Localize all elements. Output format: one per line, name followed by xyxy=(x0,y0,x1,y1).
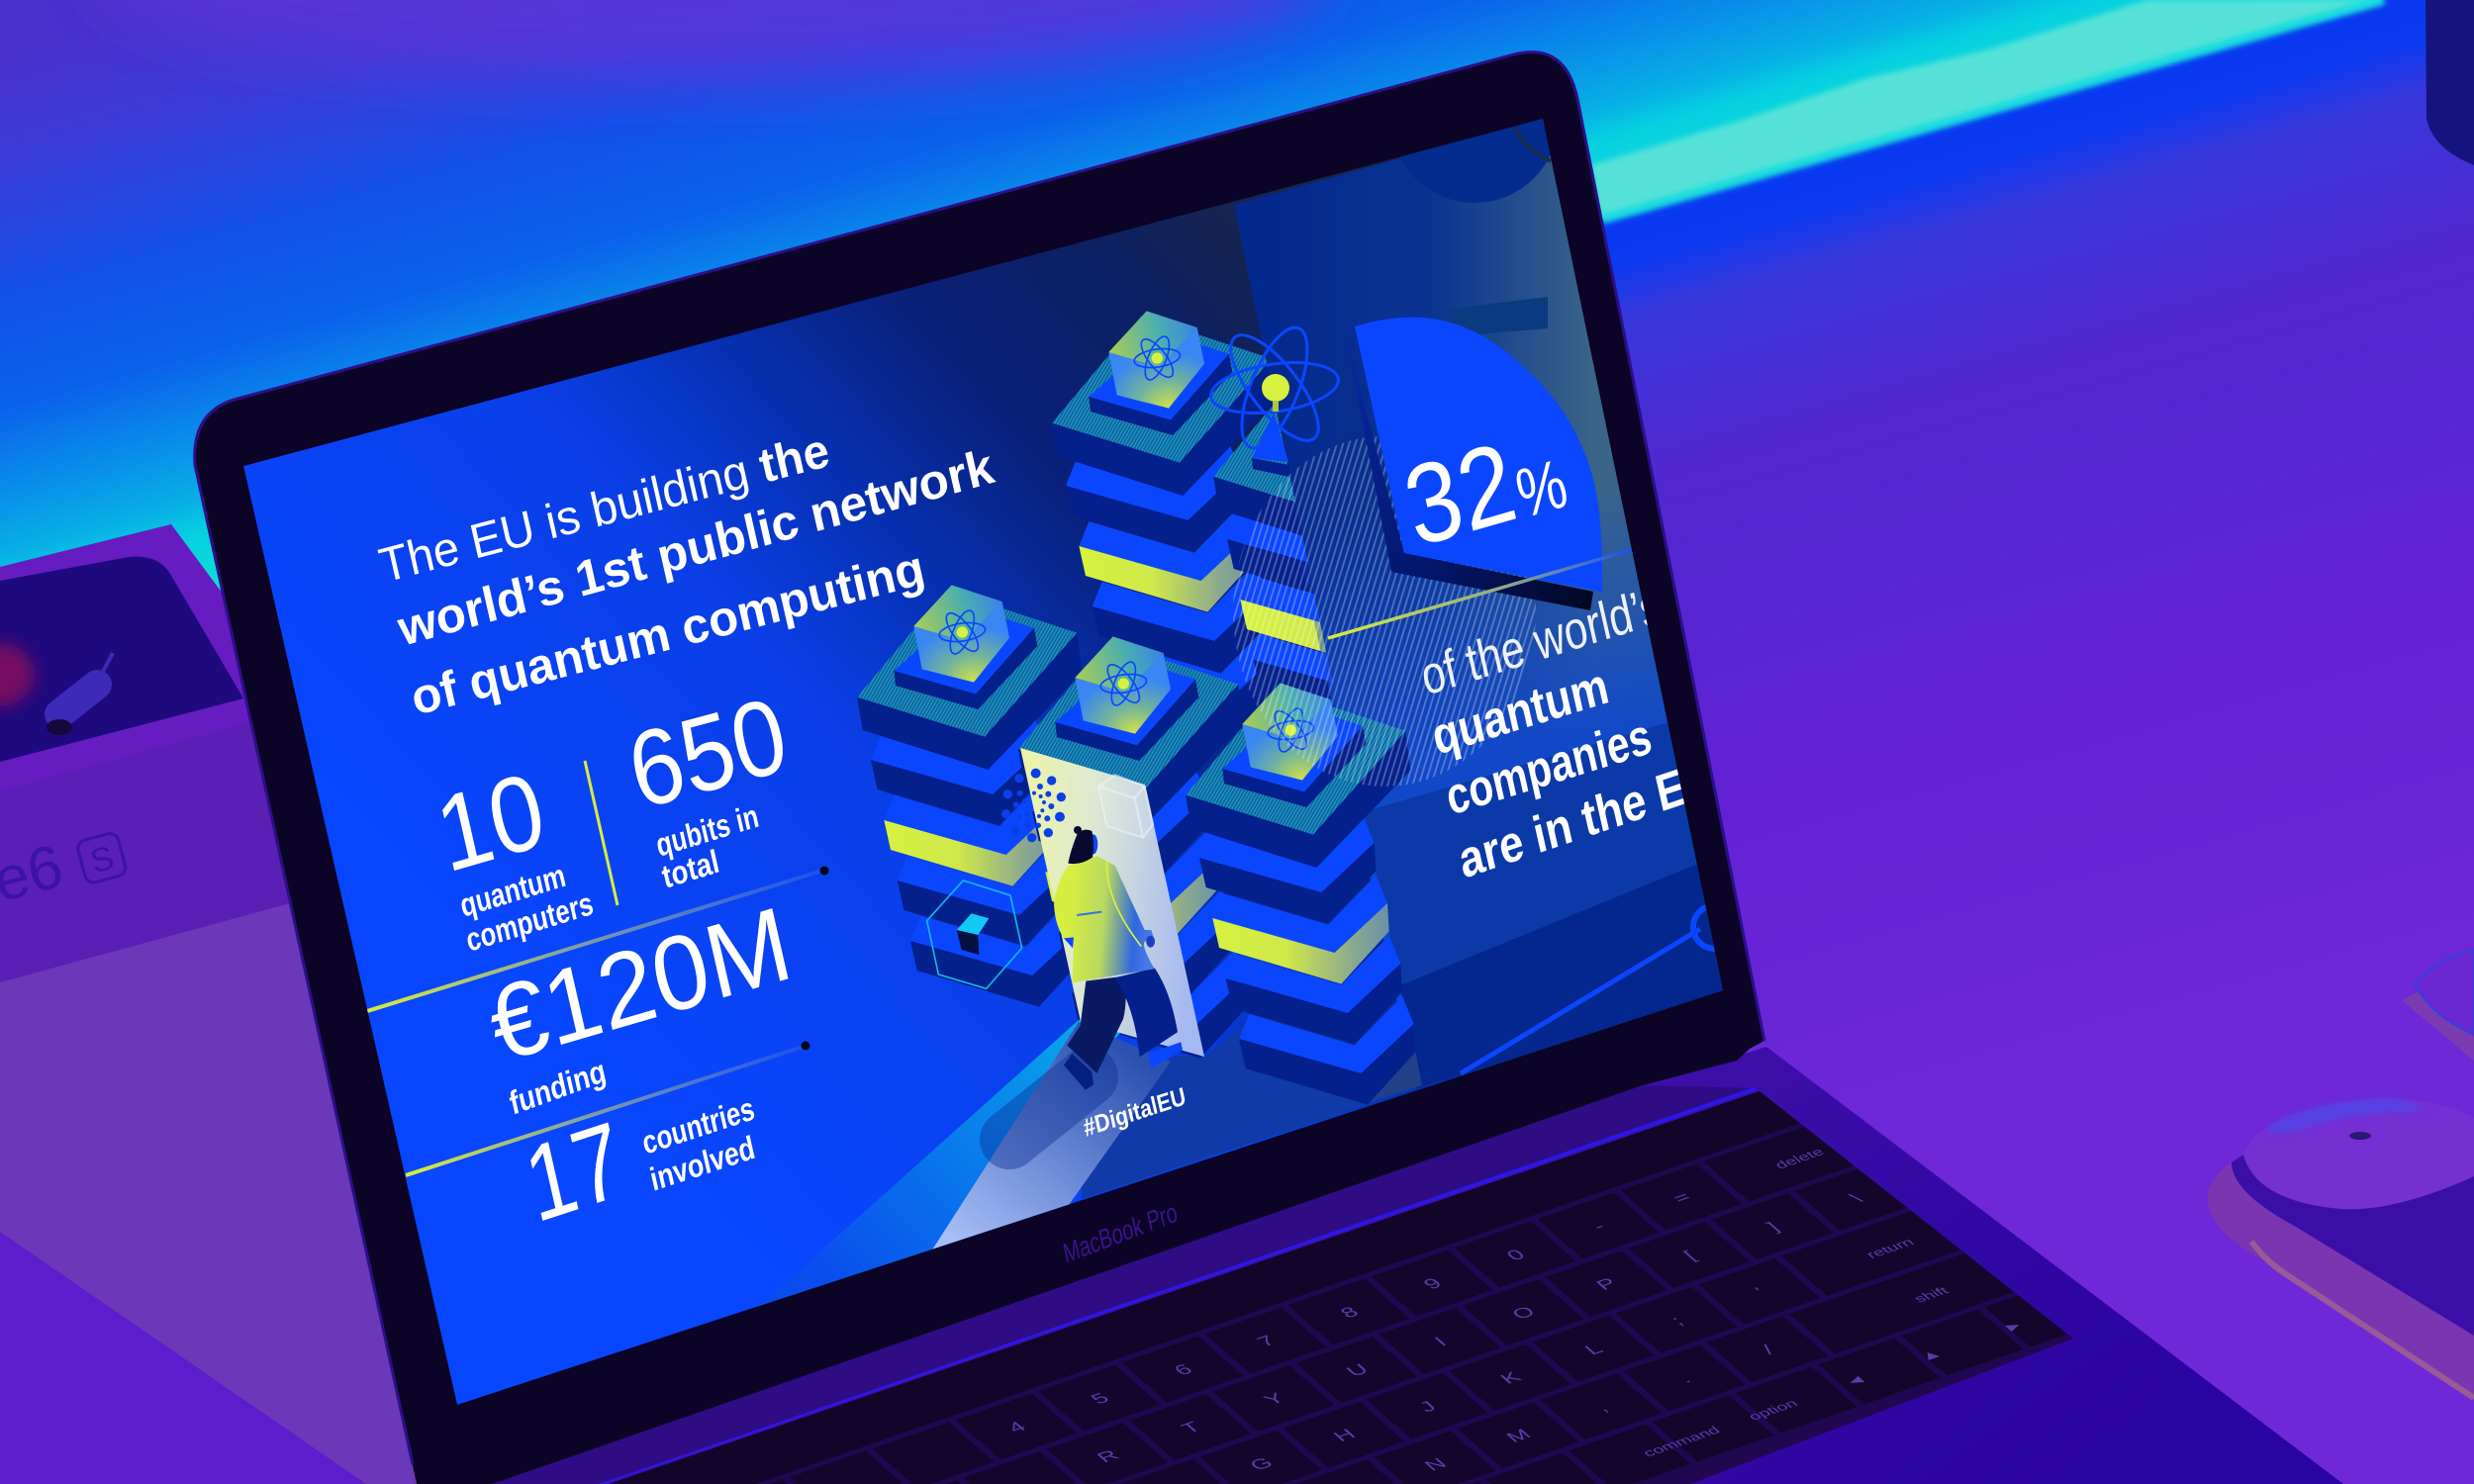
key legends: J xyxy=(1415,1399,1441,1415)
modifier row xyxy=(1472,1294,2066,1484)
pie slice xyxy=(1355,318,1602,592)
object top xyxy=(2415,950,2474,1034)
sim pin xyxy=(47,653,113,735)
lid edge highlight xyxy=(195,52,1764,1464)
connector line to pie xyxy=(1328,550,1631,638)
pie chart 32 percent xyxy=(1347,318,1602,610)
key legends: return xyxy=(1863,1237,1918,1261)
wall upper xyxy=(1234,119,1722,991)
background: wall xyxy=(0,0,2474,712)
key legends: T xyxy=(1178,1419,1205,1437)
key legends: [ xyxy=(1679,1249,1700,1263)
key legends: U xyxy=(1342,1361,1373,1380)
background: violet wall glow xyxy=(99,0,1326,79)
object shell xyxy=(2402,992,2474,1061)
key legends: ' xyxy=(1751,1285,1769,1299)
tower left xyxy=(857,590,1087,1007)
dark arc at top xyxy=(1513,126,1551,161)
background: turquoise LED strip xyxy=(1591,0,2384,220)
mouse disc highlight xyxy=(2266,1098,2425,1134)
tower centre cube xyxy=(1055,636,1198,761)
mouse xyxy=(2208,1098,2474,1398)
box label badge: S xyxy=(86,839,118,881)
key legends: H xyxy=(1329,1427,1360,1444)
screen background xyxy=(243,119,1723,1405)
right leg xyxy=(1115,968,1178,1057)
face xyxy=(1090,834,1097,854)
red reflection xyxy=(0,643,35,706)
stat: 17 countries involved: 17 xyxy=(515,1098,633,1245)
stat: 120M funding: €120M xyxy=(479,884,802,1084)
tower back centre cube xyxy=(1089,311,1232,435)
shift key xyxy=(1789,1252,2015,1353)
mouse shell xyxy=(2208,1162,2474,1398)
text: share of quantum companies xyxy=(1415,575,1721,890)
macbook label: MacBook Pro xyxy=(1060,1196,1180,1269)
key legends: ; xyxy=(1666,1313,1687,1329)
coat xyxy=(1054,856,1155,982)
text: 32 percent: 32 xyxy=(1394,418,1526,571)
left leg xyxy=(1067,976,1126,1073)
key legends: command xyxy=(1640,1425,1724,1459)
left hand xyxy=(1064,937,1074,948)
key legends: 6 xyxy=(1170,1361,1196,1378)
key legends: , xyxy=(1591,1400,1612,1415)
key legends: option xyxy=(1746,1398,1801,1423)
background: LED strip edge xyxy=(1601,0,2384,220)
pie shadow xyxy=(1347,341,1593,610)
divider line with dot 2 xyxy=(406,1041,809,1175)
return key xyxy=(1781,1211,1961,1296)
coat seam xyxy=(1106,861,1141,947)
box side xyxy=(0,714,290,982)
stat: 10 quantum computers: quantum xyxy=(456,857,569,924)
box lower desk xyxy=(0,895,465,1484)
key legends: L xyxy=(1580,1341,1608,1358)
wireframe cube and small cube xyxy=(927,881,1022,988)
coat belt xyxy=(1077,912,1101,915)
key legends: 5 xyxy=(1087,1390,1113,1407)
mouse button disc xyxy=(2243,1098,2474,1209)
floor light beam xyxy=(757,1020,1120,1308)
heading: world’s 1st public network xyxy=(392,438,999,657)
key legends: ▴ xyxy=(1917,1346,1944,1363)
key legends: 9 xyxy=(1419,1275,1446,1292)
stat: 17 countries involved: involved xyxy=(646,1129,758,1198)
key legends: R xyxy=(1093,1447,1123,1466)
box label badge xyxy=(76,832,128,884)
network node xyxy=(1693,905,1737,949)
keyboard well xyxy=(609,1091,2073,1484)
key legends: M xyxy=(1502,1427,1536,1445)
key legends: = xyxy=(1668,1189,1696,1206)
small cube front xyxy=(957,930,979,955)
tower right cube xyxy=(1222,683,1366,807)
hinge light line xyxy=(599,1086,1757,1484)
dark top circle xyxy=(1399,119,1550,203)
stat: 650 qubits in total: qubits in xyxy=(652,796,762,864)
key legends: K xyxy=(1496,1369,1526,1387)
home key row xyxy=(1121,1258,1821,1484)
key legends xyxy=(1003,1144,2027,1484)
upper right object on desk xyxy=(2402,950,2474,1061)
divider line with dot 1 xyxy=(367,867,829,1011)
heading: of quantum computing xyxy=(406,540,929,726)
qwerty key row xyxy=(945,1164,1917,1484)
door wireframe cube xyxy=(1098,775,1153,838)
tower left cube xyxy=(894,585,1037,709)
tower right xyxy=(1186,688,1415,1105)
bottom left desk xyxy=(0,1232,366,1484)
bottom letter row xyxy=(1295,1316,1829,1484)
box dark recess xyxy=(0,557,243,762)
floor white beam xyxy=(920,1022,1171,1268)
person xyxy=(1054,826,1183,1090)
touch bar xyxy=(595,1073,1829,1484)
stat: 650 qubits in total xyxy=(618,674,798,895)
stat: 650 qubits in total: total xyxy=(658,843,722,895)
key legends: / xyxy=(1758,1343,1778,1357)
wall lower tint xyxy=(1286,495,1723,1088)
key legends: ] xyxy=(1762,1220,1783,1235)
text: 32 percent: % xyxy=(1509,444,1573,533)
key legends: 7 xyxy=(1253,1333,1280,1349)
text: share of quantum companies: are in the EU xyxy=(1454,748,1721,890)
dots dissolving on tower xyxy=(1001,774,1036,842)
mouse shell edge xyxy=(2251,1242,2474,1398)
tower centre xyxy=(1018,641,1248,1059)
key legends: delete xyxy=(1771,1147,1828,1171)
key legends: - xyxy=(1588,1219,1610,1235)
box top xyxy=(0,524,259,791)
wireframe outline xyxy=(927,881,1022,988)
key legends: P xyxy=(1592,1275,1622,1293)
stat: 17 countries involved xyxy=(515,1089,758,1245)
door dots xyxy=(1031,769,1066,837)
laptop deck xyxy=(488,1047,2343,1484)
hair xyxy=(1068,830,1094,864)
key legends: \ xyxy=(1846,1191,1866,1206)
key legends: Y xyxy=(1260,1390,1289,1408)
screen infographic xyxy=(243,35,1737,1405)
key legends: shift xyxy=(1911,1285,1952,1305)
door of light xyxy=(1020,748,1204,1057)
tower back centre xyxy=(1052,316,1282,733)
key legends: ▸ xyxy=(2000,1318,2027,1335)
dark wall plaque xyxy=(1451,297,1548,336)
key legends: . xyxy=(1674,1371,1695,1386)
stat: 17 countries involved: countries xyxy=(638,1089,758,1161)
key legends: 8 xyxy=(1336,1304,1363,1321)
number key row xyxy=(769,1163,1743,1484)
key legends: 0 xyxy=(1502,1247,1529,1263)
stat: 650 qubits in total: 650 xyxy=(618,674,798,831)
network line xyxy=(1461,929,1700,1073)
mouse body xyxy=(2232,1155,2474,1336)
left shoe xyxy=(1064,1054,1094,1090)
hinge strip xyxy=(488,1085,1757,1484)
wall floor band xyxy=(1400,863,1727,1088)
key legends: G xyxy=(1246,1455,1278,1473)
text: share of quantum companies: of the world’s xyxy=(1415,575,1666,707)
floor xyxy=(1082,999,1416,1199)
small cube top xyxy=(957,913,989,935)
stat divider xyxy=(585,761,618,905)
delete key xyxy=(1704,1127,1854,1201)
stat: 120M funding: funding xyxy=(506,1052,609,1122)
door details xyxy=(1031,769,1153,838)
laptop lid bezel xyxy=(195,52,1764,1484)
mouse scroll xyxy=(2349,1132,2371,1140)
text: share of quantum companies: companies xyxy=(1441,707,1657,827)
right shoe xyxy=(1148,1042,1183,1068)
key legends: N xyxy=(1420,1455,1451,1474)
large atom icon xyxy=(1207,320,1342,456)
heading: The EU is building the xyxy=(374,423,834,594)
hatched light disc xyxy=(1233,436,1536,787)
stat: 10 quantum computers: 10 xyxy=(426,749,555,894)
stat: 10 quantum computers: computers xyxy=(462,884,597,959)
keyboard keys xyxy=(595,1073,2076,1484)
key legends: 4 xyxy=(1003,1419,1031,1436)
key legends: ◂ xyxy=(1843,1372,1868,1389)
top right dark block xyxy=(2426,0,2474,165)
key legends: I xyxy=(1430,1335,1451,1349)
floor person shadow xyxy=(1009,1076,1089,1140)
panel: right wall xyxy=(1234,119,1723,1088)
stat: 10 quantum computers xyxy=(426,749,597,959)
key legends: O xyxy=(1508,1304,1540,1323)
hair bun xyxy=(1074,826,1082,834)
text: share of quantum companies: quantum xyxy=(1427,657,1614,767)
wall middle band xyxy=(1363,720,1700,985)
floor shadow triangle xyxy=(1369,1049,1422,1101)
small figure under large atom xyxy=(1252,413,1289,477)
phone box on the left xyxy=(0,524,465,1484)
right hand xyxy=(1146,936,1155,948)
hashtag: #DigitalEU xyxy=(1081,1082,1189,1143)
tower back right xyxy=(1213,406,1334,706)
